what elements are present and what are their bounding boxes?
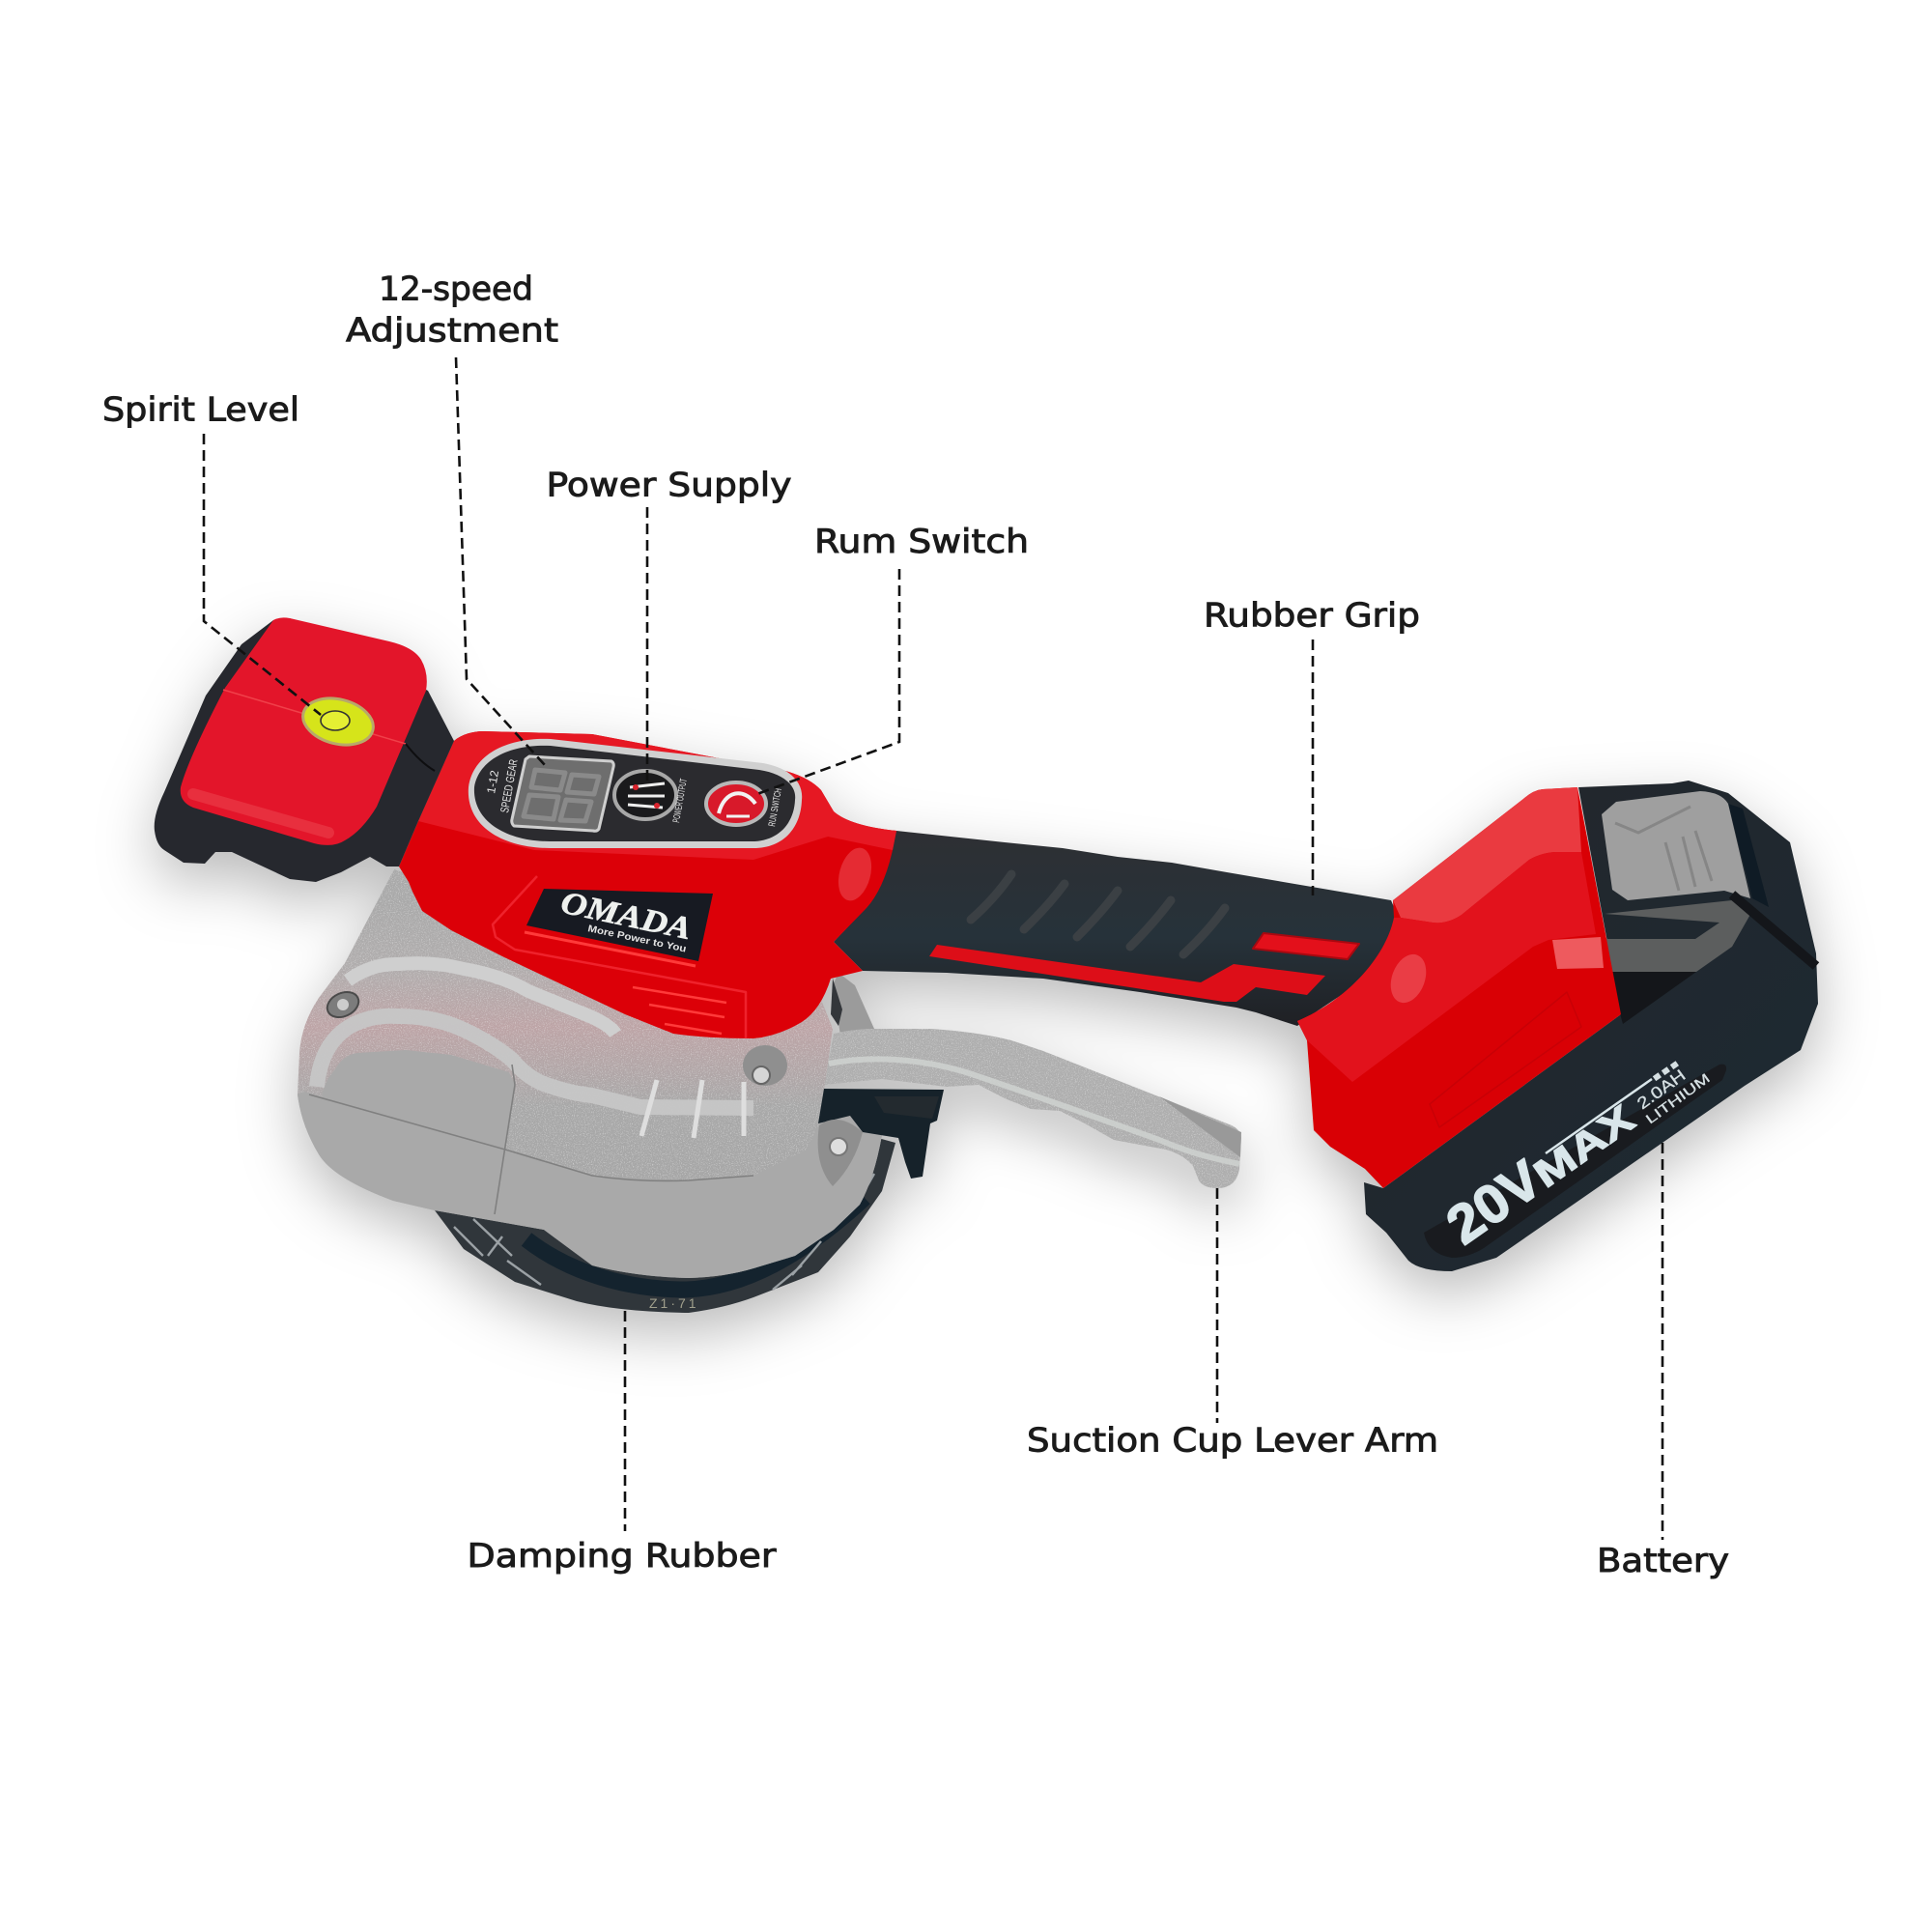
control panel silver rim	[469, 739, 802, 848]
housing lower smooth panel	[298, 1092, 882, 1278]
battery release button	[1602, 791, 1750, 900]
spirit level bubble	[298, 692, 378, 752]
panel text speed gear: SPEED GEAR	[497, 758, 521, 814]
housing side panel	[322, 1050, 515, 1150]
leader: rubber grip	[1312, 639, 1314, 895]
rear silver column	[831, 973, 874, 1036]
vent lines	[633, 987, 726, 1034]
battery text LITHIUM: LITHIUM	[1642, 1070, 1713, 1126]
grip ridges	[971, 874, 1225, 954]
label: damping rubber: Damping Rubber	[468, 1537, 777, 1576]
battery charge dots	[1653, 1061, 1679, 1081]
nut on arc bracket	[818, 1120, 863, 1186]
upper body facet	[418, 731, 896, 860]
screw right	[743, 1045, 787, 1086]
leader: 12-speed adjustment	[456, 357, 545, 765]
panel text run switch: RUN SWITCH	[767, 787, 784, 828]
label: 12-speed adjustment	[346, 270, 558, 350]
run switch button	[706, 782, 766, 825]
head cap with spirit level	[155, 617, 454, 882]
leader: rum switch	[754, 569, 899, 795]
label: rum switch: Rum Switch	[814, 523, 1029, 561]
label: battery: Battery	[1597, 1542, 1729, 1580]
silver housing	[298, 869, 882, 1278]
product: tile vibration tool	[155, 617, 1818, 1313]
label: 12-speed adjustment: Adjustment	[346, 311, 558, 350]
battery text 20V: 20V	[1435, 1149, 1552, 1256]
label: 12-speed adjustment: 12-speed	[379, 270, 533, 309]
battery side window	[1728, 804, 1769, 907]
leader: power supply	[646, 507, 648, 785]
suction cup lever arm	[824, 1029, 1241, 1188]
label: spirit level: Spirit Level	[102, 390, 299, 429]
logo tagline: More Power to You	[586, 923, 687, 955]
omada logo plate	[526, 886, 713, 961]
panel text 1-12: 1-12	[484, 769, 501, 795]
label: suction cup lever arm: Suction Cup Lever Arm	[1027, 1422, 1438, 1461]
leader: spirit level	[204, 434, 321, 715]
battery text MAX: MAX	[1526, 1097, 1643, 1196]
main red body	[399, 731, 896, 1038]
battery rule	[1546, 1079, 1652, 1153]
label: rubber grip: Rubber Grip	[1204, 597, 1420, 636]
power supply button	[614, 771, 676, 819]
battery textured shoulder	[1605, 900, 1752, 972]
battery label plate	[1424, 1065, 1726, 1258]
raised ribs	[317, 1016, 753, 1108]
ring marking: Z1·71	[649, 1295, 699, 1311]
grip red strip short	[1253, 933, 1359, 959]
rear housing red	[1297, 787, 1621, 1188]
battery pack	[1364, 781, 1818, 1271]
leader: battery	[1662, 1143, 1663, 1540]
screw left	[324, 987, 362, 1022]
LCD display	[512, 756, 613, 831]
damping rubber suction ring	[435, 1130, 895, 1313]
label: power supply: Power Supply	[547, 466, 792, 504]
panel text power output: POWER OUTPUT	[671, 778, 690, 824]
battery text 2.0AH: 2.0AH	[1634, 1065, 1689, 1113]
callout lines	[204, 357, 1662, 1540]
rubber grip	[834, 829, 1401, 1026]
latch bracket	[818, 1089, 944, 1179]
grip red strip long	[929, 945, 1325, 1002]
leader: suction cup lever arm	[1216, 1188, 1218, 1423]
leader: damping rubber	[624, 1311, 626, 1531]
logo text OMADA: OMADA	[557, 886, 695, 947]
